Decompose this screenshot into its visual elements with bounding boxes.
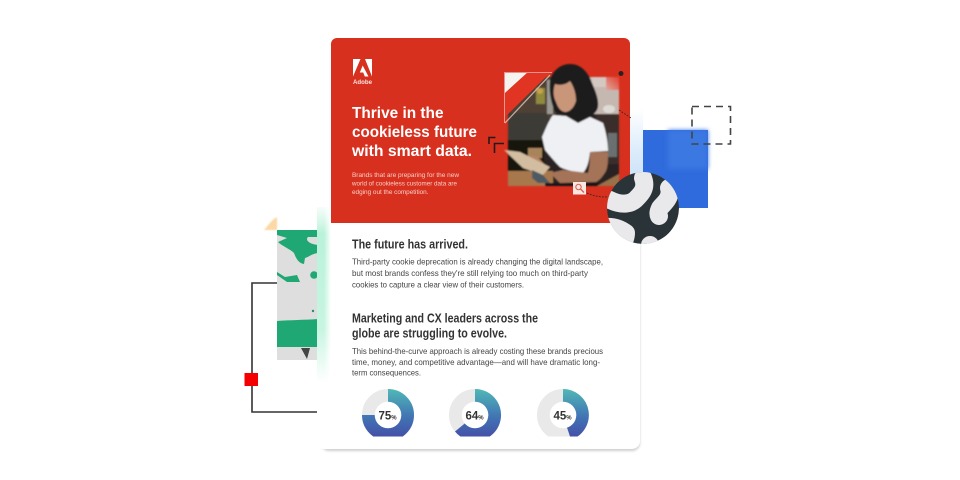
donut chart: 64%: 64%	[466, 410, 484, 422]
dashed selection box	[692, 106, 730, 144]
icon: magnifier	[573, 182, 586, 194]
intro text: edging out the competition.	[352, 189, 429, 196]
face	[554, 81, 576, 112]
intro text	[351, 172, 460, 196]
icon: Adobe logo: Adobe	[353, 80, 373, 86]
card: white report page	[317, 196, 640, 451]
title: cookieless future	[352, 124, 477, 141]
intro text: world of cookieless customer data are	[351, 180, 458, 188]
donut chart: 64%	[456, 395, 495, 434]
heading: the future has arrived: The future has arrived.	[352, 238, 468, 252]
tablet	[504, 150, 550, 175]
paragraph: behind-the-curve: This behind-the-curve approach is already costing these brands precious	[352, 347, 603, 356]
paragraph: behind-the-curve	[352, 347, 603, 378]
forearm	[550, 152, 608, 183]
red square node	[244, 373, 258, 386]
donut chart: 45%	[544, 396, 582, 434]
paragraph: behind-the-curve: term consequences.	[352, 368, 421, 378]
heading: marketing and CX leaders: globe are struggling to evolve.	[352, 326, 507, 340]
corner brackets	[489, 138, 504, 153]
title: with smart data.	[351, 143, 472, 160]
frame anchor dot	[618, 71, 624, 76]
paragraph: third-party cookies	[352, 258, 603, 290]
hair	[550, 64, 598, 126]
photo corner: white and red triangles	[504, 72, 552, 123]
paragraph: behind-the-curve: time, money, and competitive advantage—and will have dramatic long-	[352, 358, 600, 367]
photo: woman using a tablet	[504, 64, 619, 186]
heading: marketing and CX leaders: Marketing and CX leaders across the	[352, 312, 538, 326]
mint side glow	[317, 207, 331, 383]
donut chart: 45%: 45%	[554, 410, 572, 422]
icon: Adobe logo	[353, 59, 373, 86]
donut chart: 75%: 75%	[378, 410, 397, 422]
white top	[542, 115, 608, 173]
red hero panel	[331, 38, 630, 223]
paragraph: third-party cookies: cookies to capture a clear view of their customers.	[352, 280, 524, 290]
title	[351, 105, 477, 160]
heading: marketing and CX leaders	[352, 312, 538, 340]
donut chart: 75%	[368, 396, 408, 434]
dashed connector lines	[587, 110, 631, 197]
orange blur accent	[264, 217, 277, 230]
map texture image	[277, 230, 318, 360]
paragraph: third-party cookies: but most brands confess they're still relying too much on third-party	[352, 269, 589, 278]
blurred blue square overlay	[668, 130, 708, 169]
light blue side glow	[630, 108, 643, 193]
blue square	[643, 130, 708, 208]
patterned circle	[607, 172, 679, 244]
intro text: Brands that are preparing for the new	[352, 172, 460, 179]
decorative connector: black bracket line with red node	[244, 283, 318, 412]
title: Thrive in the	[352, 105, 444, 122]
paragraph: third-party cookies: Third-party cookie deprecation is already changing the digital landscape,	[352, 258, 603, 266]
